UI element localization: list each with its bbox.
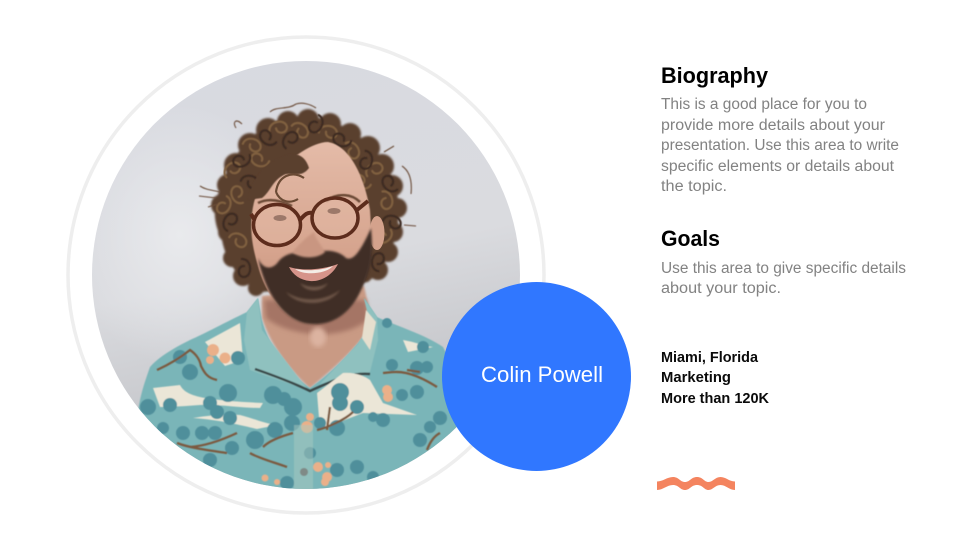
collar cream: [362, 310, 376, 350]
biography text: This is a good place for you to: [661, 96, 867, 113]
clouds: [153, 323, 433, 430]
name: Colin Powell: [481, 362, 603, 387]
beard highlights: [286, 283, 340, 303]
teeth: [295, 266, 333, 273]
teal foliage: [140, 318, 447, 490]
portrait photo: [70, 60, 522, 500]
right ear: [370, 216, 384, 250]
goals text: [661, 260, 906, 297]
biography text: [661, 96, 899, 195]
orange wave decoration: [657, 477, 735, 490]
eye right: [328, 208, 340, 214]
biography text: specific elements or details about: [661, 158, 895, 175]
forehead curl strand: [276, 174, 304, 202]
details list: Miami, Florida: [661, 350, 759, 366]
neck shadow: [264, 300, 368, 334]
forehead curl: [248, 154, 309, 200]
details list: [661, 350, 770, 407]
biography text: presentation. Use this area to write: [661, 137, 899, 154]
bridge and temples: [251, 201, 368, 220]
left lens: [254, 204, 300, 246]
hair curls: [199, 103, 416, 277]
brown branches: [157, 350, 440, 467]
blue circle: [442, 282, 631, 471]
goals text: about your topic.: [661, 280, 781, 297]
eye left: [274, 215, 286, 221]
goals text: Use this area to give specific details: [661, 260, 906, 277]
right lens: [312, 198, 358, 238]
details list: Marketing: [661, 370, 731, 386]
flowers: [206, 344, 393, 486]
face: [251, 142, 371, 324]
details list: More than 120K: [661, 391, 770, 407]
biography heading: Biography: [661, 63, 769, 88]
nose: [293, 232, 325, 257]
neck: [262, 286, 372, 388]
eyes: [274, 208, 340, 221]
smile: [289, 264, 338, 281]
shirt pattern: [140, 298, 447, 495]
eyebrows: [258, 195, 360, 206]
photo backdrop: [90, 60, 522, 492]
outer ring: [68, 37, 544, 513]
beard: [258, 228, 372, 324]
goals heading: Goals: [661, 226, 720, 251]
backdrop glow: [128, 171, 224, 304]
biography text: the topic.: [661, 178, 727, 195]
hair mass: [211, 109, 407, 296]
button: [300, 468, 308, 476]
shirt: [138, 298, 456, 489]
glasses: [251, 198, 368, 246]
placket: [294, 425, 313, 495]
biography text: provide more details about your: [661, 117, 885, 134]
adam's apple: [310, 327, 326, 347]
flyaway hairs: [199, 103, 416, 226]
collar: [244, 298, 378, 390]
name badge: [442, 282, 631, 471]
collar shadow: [255, 369, 370, 391]
